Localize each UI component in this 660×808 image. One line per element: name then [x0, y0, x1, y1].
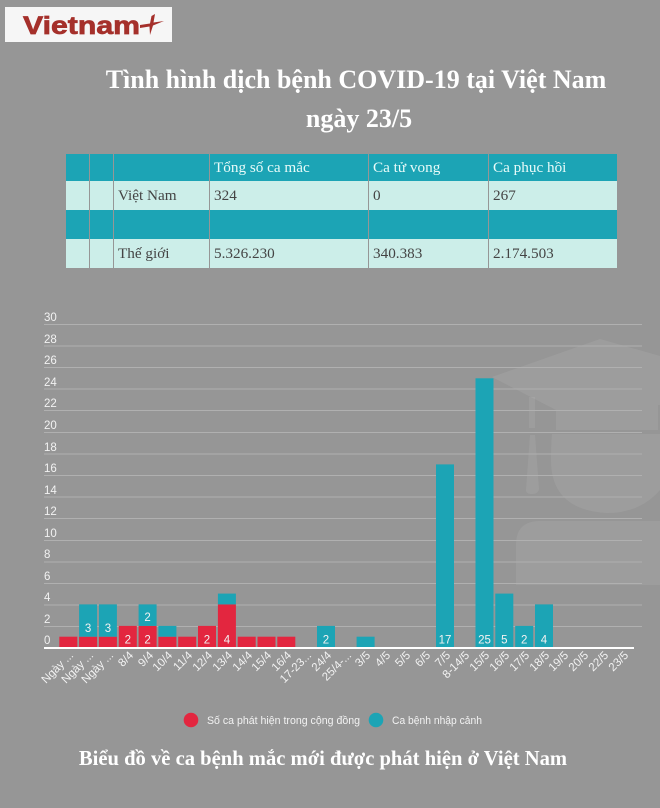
- red bars: community cases: [59, 604, 295, 648]
- bar value labels: 2: [323, 634, 329, 646]
- x axis labels: 16/5: [488, 650, 512, 674]
- x axis labels: 8/4: [116, 649, 137, 669]
- table: case statistics: Ca tử vong: [373, 158, 440, 176]
- bar value labels: 2: [125, 634, 131, 646]
- x axis labels: 22/5: [587, 650, 611, 674]
- x axis labels: 14/4: [231, 649, 256, 674]
- x axis labels: 8-14/5: [441, 650, 472, 681]
- x axis labels: 6/5: [413, 650, 433, 669]
- table: case statistics: [66, 154, 617, 268]
- logo: Vietnam+: Vietnam: [23, 12, 140, 40]
- table: case statistics: Việt Nam: [118, 186, 177, 204]
- table: case statistics: Tổng số ca mắc: [214, 158, 310, 176]
- bar value labels: 4: [541, 634, 548, 646]
- teal bars: imported cases: [79, 378, 553, 648]
- x axis labels: 12/4: [191, 649, 216, 674]
- bar value labels: 2: [521, 634, 527, 646]
- bar value labels: 3: [105, 623, 111, 635]
- bar value labels: 2: [144, 634, 151, 646]
- x axis labels: Ngày ...: [80, 650, 116, 686]
- logo: Vietnam+: [5, 7, 172, 42]
- x axis labels: 15/4: [250, 649, 275, 674]
- y axis labels: 24: [44, 377, 57, 389]
- y axis labels: 26: [44, 355, 57, 367]
- x axis labels: 23/5: [607, 650, 631, 674]
- y axis labels: 30: [44, 312, 57, 324]
- x axis labels: 10/4: [151, 649, 176, 674]
- x axis labels: 17/5: [508, 650, 532, 674]
- x axis labels: 24/4: [310, 649, 335, 674]
- table: case statistics: 2.174.503: [493, 244, 554, 262]
- y axis labels: [44, 312, 57, 647]
- legend: Số ca phát hiện trong cộng đồng: [207, 715, 360, 727]
- bar value labels: 4: [224, 634, 231, 646]
- y axis labels: 22: [44, 398, 57, 410]
- y axis labels: 20: [44, 420, 57, 432]
- x axis labels: 5/5: [393, 650, 413, 669]
- x axis labels: 11/4: [171, 649, 196, 673]
- y axis labels: 0: [44, 635, 50, 647]
- x axis labels: 19/5: [547, 650, 571, 674]
- bar value labels: 2: [204, 634, 210, 646]
- x axis labels: [40, 649, 631, 686]
- y axis labels: 2: [44, 614, 50, 626]
- x axis labels: Ngày ...: [40, 650, 76, 686]
- x axis labels: 13/4: [211, 649, 236, 674]
- x axis labels: 15/5: [468, 650, 492, 674]
- y axis labels: 28: [44, 334, 57, 346]
- y axis labels: 4: [44, 592, 51, 604]
- x axis labels: 3/5: [353, 650, 373, 669]
- title: Tình hình dịch bệnh COVID-19 tại Việt Nam: [106, 65, 606, 94]
- title date: ngày 23/5: [306, 104, 412, 133]
- table: case statistics: 0: [373, 186, 381, 204]
- y axis labels: 12: [44, 506, 57, 518]
- x axis labels: 25/4-...: [320, 650, 354, 683]
- x axis line: [44, 647, 634, 649]
- bar value labels: 25: [478, 634, 491, 646]
- x axis labels: Ngày ...: [60, 650, 96, 686]
- x axis labels: 7/5: [433, 650, 453, 669]
- table: case statistics: Thế giới: [118, 244, 169, 262]
- bar value labels: 2: [144, 612, 151, 624]
- bar value labels: 5: [501, 634, 508, 646]
- table: case statistics: 5.326.230: [214, 244, 275, 262]
- x axis labels: 20/5: [567, 650, 591, 674]
- table: case statistics: 267: [493, 186, 516, 204]
- table: case statistics: 340.383: [373, 244, 422, 262]
- bar value labels: [85, 612, 548, 646]
- x axis labels: 4/5: [373, 650, 393, 669]
- table: case statistics: Ca phục hồi: [493, 158, 566, 176]
- y axis labels: 10: [44, 528, 57, 540]
- grid lines: [44, 324, 642, 626]
- y axis labels: 14: [44, 485, 57, 497]
- y axis labels: 6: [44, 571, 50, 583]
- bar value labels: 3: [85, 623, 91, 635]
- caption: Biểu đồ về ca bệnh mắc mới được phát hiện ở Việt Nam: [79, 748, 567, 770]
- x axis labels: 17-23...: [278, 650, 314, 686]
- x axis labels: 9/4: [136, 649, 157, 669]
- icon: graduate watermark: [492, 339, 660, 585]
- y axis labels: 8: [44, 549, 50, 561]
- x axis labels: 16/4: [270, 649, 295, 674]
- x axis labels: 18/5: [528, 650, 552, 674]
- table: case statistics: 324: [214, 186, 237, 204]
- legend: [184, 713, 482, 727]
- y axis labels: 18: [44, 442, 57, 454]
- legend: Ca bệnh nhập cảnh: [392, 715, 482, 727]
- bar value labels: 17: [439, 634, 451, 646]
- y axis labels: 16: [44, 463, 57, 475]
